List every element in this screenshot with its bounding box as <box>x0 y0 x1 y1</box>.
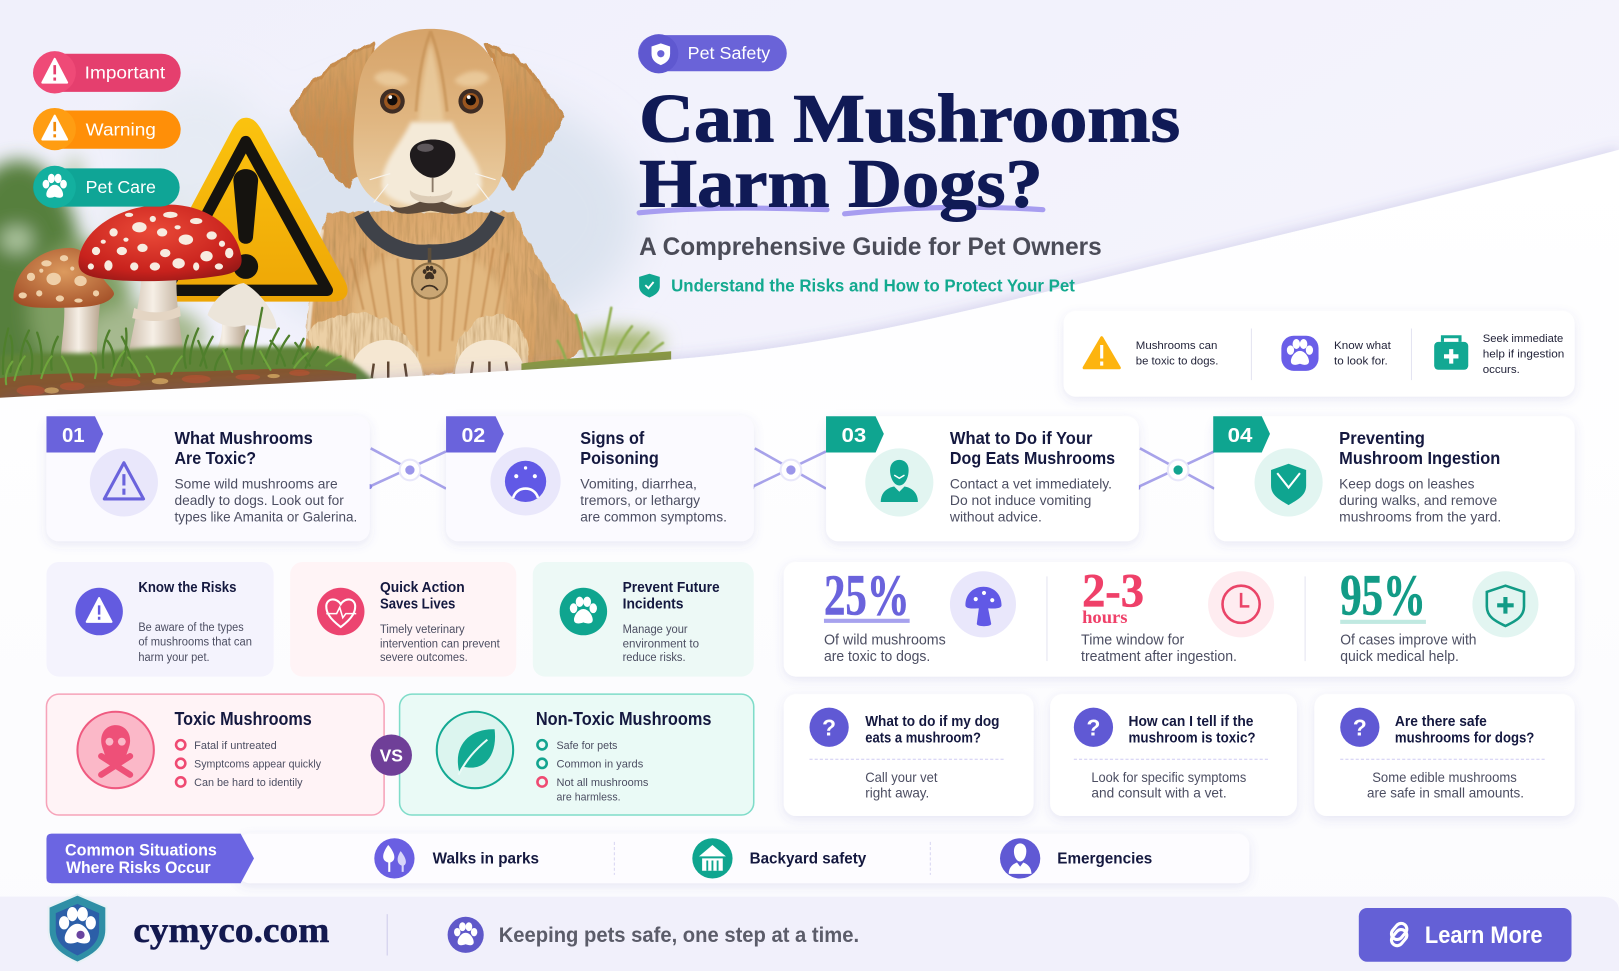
FAQ card 3: Are there safe <box>1395 713 1487 730</box>
panel: quick action: Quick Action <box>380 579 465 596</box>
step card 01: deadly to dogs. Look out for <box>174 492 344 508</box>
step card 03: Contact a vet immediately. <box>950 476 1112 492</box>
dog mouth <box>389 196 473 214</box>
logo wordmark: cymyco.com <box>133 910 329 950</box>
list: toxic facts: Symptcoms appear quickly <box>194 759 321 771</box>
stat: 95%: quick medical help. <box>1340 649 1459 665</box>
connector 3-4 <box>1135 448 1214 490</box>
step card 02: Signs of <box>580 428 644 448</box>
situation: emergencies: Emergencies <box>1057 851 1152 868</box>
stat: 2-3 hours <box>1081 565 1274 665</box>
step card 03: 03 <box>842 424 866 447</box>
panel: prevent future incidents: Prevent Future <box>623 579 720 596</box>
icon: paw <box>1281 336 1319 371</box>
tag: Warning <box>33 108 181 150</box>
dog tag <box>412 248 447 299</box>
tag: Pet Care <box>33 166 180 208</box>
situation: emergencies <box>1000 838 1152 879</box>
stat: 2-3 hours: Time window for <box>1081 633 1184 649</box>
left orange mushroom <box>13 248 114 380</box>
step card 01: types like Amanita or Galerina. <box>174 509 357 525</box>
tagline: Keeping pets safe, one step at a time. <box>499 922 859 947</box>
stat: 25%: 25% <box>824 563 910 628</box>
banner heading: Where Risks Occur <box>66 858 211 877</box>
panel: know the risks: of mushrooms that can <box>138 635 252 649</box>
dog body <box>306 212 583 380</box>
FAQ card 1: ? <box>822 714 836 740</box>
footer <box>0 895 1619 971</box>
FAQ card 2: ? <box>1087 714 1100 740</box>
panel: prevent future incidents: Incidents <box>623 595 684 612</box>
panel: toxic mushrooms: Toxic Mushrooms <box>174 709 312 729</box>
title: Can Mushrooms <box>639 80 1180 157</box>
panel: know the risks: Know the Risks <box>138 579 236 596</box>
panel: quick action: Saves Lives <box>380 595 455 612</box>
badge: Pet Safety: Pet Safety <box>688 43 770 63</box>
step card 04: during walks, and remove <box>1339 492 1497 508</box>
soft backdrop <box>103 83 640 346</box>
FAQ card 1: right away. <box>865 785 929 800</box>
panel: know the risks: Be aware of the types <box>138 620 244 634</box>
button: learn more <box>1359 908 1572 962</box>
FAQ card 2: and consult with a vet. <box>1091 785 1227 800</box>
situation: walks in parks: Walks in parks <box>433 851 539 868</box>
icon: skull and crossbones <box>77 712 154 788</box>
list: non-toxic facts: Common in yards <box>557 759 644 771</box>
stat: 95% <box>1340 563 1538 665</box>
fact 2: to look for. <box>1334 356 1388 368</box>
logo shield <box>49 895 106 963</box>
dog nose <box>410 139 455 178</box>
step card 04: mushrooms from the yard. <box>1339 509 1501 525</box>
list: non-toxic facts <box>537 740 649 804</box>
step card 01: What Mushrooms <box>174 428 313 448</box>
grass and soil <box>0 308 671 405</box>
step card 04: Keep dogs on leashes <box>1339 476 1474 492</box>
step card 01: 01 <box>62 424 85 447</box>
tagline <box>448 917 859 953</box>
panel: quick action <box>290 562 516 677</box>
fact 1: be toxic to dogs. <box>1136 356 1218 368</box>
hero illustration: dog, warning sign and mushrooms <box>0 29 671 405</box>
step card 02: Vomiting, diarrhea, <box>580 476 697 492</box>
connector 2-3 <box>749 448 826 490</box>
FAQ card 1 <box>784 694 1034 816</box>
dog eyes <box>380 89 483 114</box>
FAQ card 2: mushroom is toxic? <box>1129 730 1256 747</box>
FAQ card 2: How can I tell if the <box>1129 713 1253 730</box>
stat: 2-3 hours: treatment after ingestion. <box>1081 649 1237 665</box>
tag: Warning: Warning <box>86 119 156 139</box>
panel: toxic mushrooms <box>46 694 384 815</box>
panel: prevent future incidents: reduce risks. <box>623 650 686 664</box>
step card 02: are common symptoms. <box>580 509 727 525</box>
FAQ card 3: ? <box>1353 714 1367 740</box>
step card 04: 04 <box>1228 424 1253 447</box>
fact 1: Mushrooms can <box>1136 340 1217 352</box>
FAQ card 3 <box>1314 694 1575 816</box>
key facts card <box>1064 311 1575 397</box>
icon: shield <box>1255 448 1323 516</box>
collar <box>361 214 498 252</box>
badge: Pet Safety <box>638 34 787 73</box>
banner heading <box>46 834 254 883</box>
situation: backyard safety <box>692 838 866 879</box>
icon: sick face <box>490 447 561 515</box>
step card 03: Do not induce vomiting <box>950 492 1091 508</box>
fact 3: Seek immediate <box>1483 333 1563 345</box>
list: non-toxic facts: Safe for pets <box>557 740 618 752</box>
stat: 95%: 95% <box>1340 563 1426 628</box>
common situations bar <box>46 834 1249 883</box>
dog forelegs and paws <box>308 314 423 384</box>
panel: quick action: Timely veterinary <box>380 622 465 636</box>
FAQ card 2 <box>1050 694 1297 816</box>
title <box>639 80 1180 222</box>
step card 03: Dog Eats Mushrooms <box>950 448 1115 468</box>
panel: non-toxic mushrooms <box>400 694 754 815</box>
panel: know the risks: harm your pet. <box>138 650 210 664</box>
icon: first aid kit <box>1434 337 1468 370</box>
fact 3: occurs. <box>1483 364 1520 376</box>
stat: 2-3 hours: hours <box>1082 607 1128 627</box>
step card 04 <box>1213 416 1575 541</box>
step card 02: Poisoning <box>580 448 659 468</box>
stat: 25% <box>824 563 1016 665</box>
step card 03 <box>826 416 1139 541</box>
icon: warning triangle <box>1084 338 1119 368</box>
icon: warning <box>90 448 158 516</box>
title underline <box>639 207 1043 214</box>
title: Harm Dogs? <box>639 145 1043 222</box>
situation: walks in parks <box>374 838 539 879</box>
FAQ card 1: Call your vet <box>865 770 938 785</box>
warning sign <box>148 118 348 302</box>
tag: Important <box>33 51 181 93</box>
banner heading: Common Situations <box>65 840 217 859</box>
VS badge: VS <box>380 745 403 765</box>
FAQ card 3: Some edible mushrooms <box>1372 770 1517 785</box>
list: non-toxic facts: are harmless. <box>557 792 621 804</box>
fact 3: help if ingestion <box>1483 348 1564 360</box>
FAQ card 1: What to do if my dog <box>865 713 999 730</box>
dog head <box>353 29 506 213</box>
big red mushroom <box>78 205 242 383</box>
panel: know the risks <box>46 562 274 677</box>
stat: 95%: Of cases improve with <box>1340 633 1477 649</box>
FAQ card 3: mushrooms for dogs? <box>1395 730 1534 747</box>
stat: 2-3 hours: 2-3 <box>1082 565 1144 617</box>
blurred foliage <box>0 157 663 398</box>
step card 04: Mushroom Ingestion <box>1339 448 1500 468</box>
FAQ card 1: eats a mushroom? <box>865 730 981 747</box>
step card 03: without advice. <box>949 509 1042 525</box>
panel: quick action: severe outcomes. <box>380 650 468 664</box>
subtitle: A Comprehensive Guide for Pet Owners <box>639 234 1102 261</box>
list: toxic facts: Can be hard to identily <box>194 777 303 789</box>
small white mushroom <box>205 283 277 379</box>
step card 02: tremors, or lethargy <box>580 492 700 508</box>
connector 1-2 <box>367 448 446 489</box>
panel: prevent future incidents: Manage your <box>623 622 688 636</box>
FAQ card 3: are safe in small amounts. <box>1367 785 1524 800</box>
step card 03: What to Do if Your <box>950 428 1093 448</box>
list: toxic facts: Fatal if untreated <box>194 740 277 752</box>
step card 02 <box>446 416 754 541</box>
stat: 25%: Of wild mushrooms <box>824 633 946 649</box>
step card 01: Are Toxic? <box>174 448 256 468</box>
fact 2: Know what <box>1334 340 1392 352</box>
panel: non-toxic mushrooms: Non-Toxic Mushrooms <box>536 709 711 729</box>
fact 3 <box>1483 333 1564 376</box>
dog <box>292 29 584 384</box>
list: toxic facts <box>176 740 321 789</box>
fact 2 <box>1334 340 1392 368</box>
stat: 25%: are toxic to dogs. <box>824 649 930 665</box>
icon: leaf <box>437 712 513 788</box>
panel: statistics <box>784 562 1575 677</box>
panel: prevent future incidents <box>533 562 754 677</box>
tagline with shield: Understand the Risks and How to Protect Your Pet <box>671 275 1075 295</box>
panel: prevent future incidents: environment to <box>623 637 699 651</box>
tag: Pet Care: Pet Care <box>86 177 156 197</box>
panel: quick action: intervention can prevent <box>380 637 500 651</box>
VS badge <box>371 734 412 776</box>
step card 01: Some wild mushrooms are <box>174 476 338 492</box>
list: non-toxic facts: Not all mushrooms <box>557 777 649 789</box>
step card 01 <box>46 416 370 541</box>
situation: backyard safety: Backyard safety <box>750 851 866 868</box>
tag: Important: Important <box>85 63 165 83</box>
fact 1 <box>1136 340 1218 368</box>
button: learn more: Learn More <box>1425 922 1543 949</box>
dog ears <box>292 43 375 187</box>
step card 02: 02 <box>462 424 485 447</box>
FAQ card 2: Look for specific symptoms <box>1091 770 1247 785</box>
icon: veterinarian <box>865 448 933 516</box>
step card 04: Preventing <box>1339 428 1425 448</box>
